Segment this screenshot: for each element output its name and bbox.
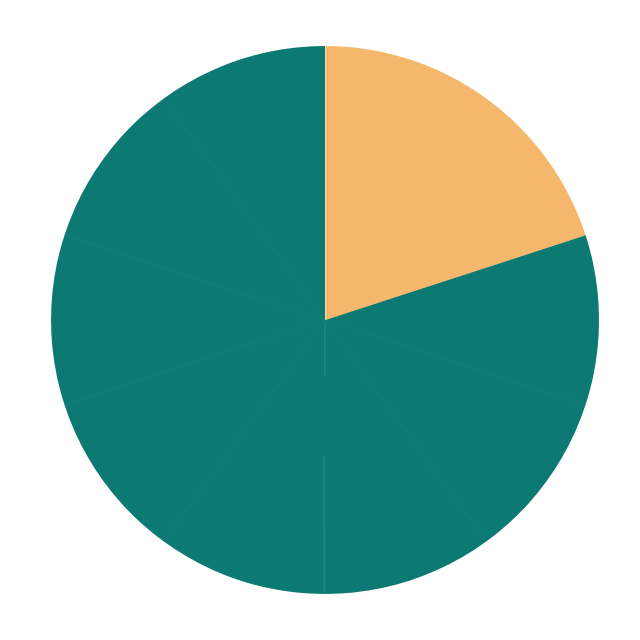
orange slice [326,46,586,320]
teal slices [51,46,599,594]
